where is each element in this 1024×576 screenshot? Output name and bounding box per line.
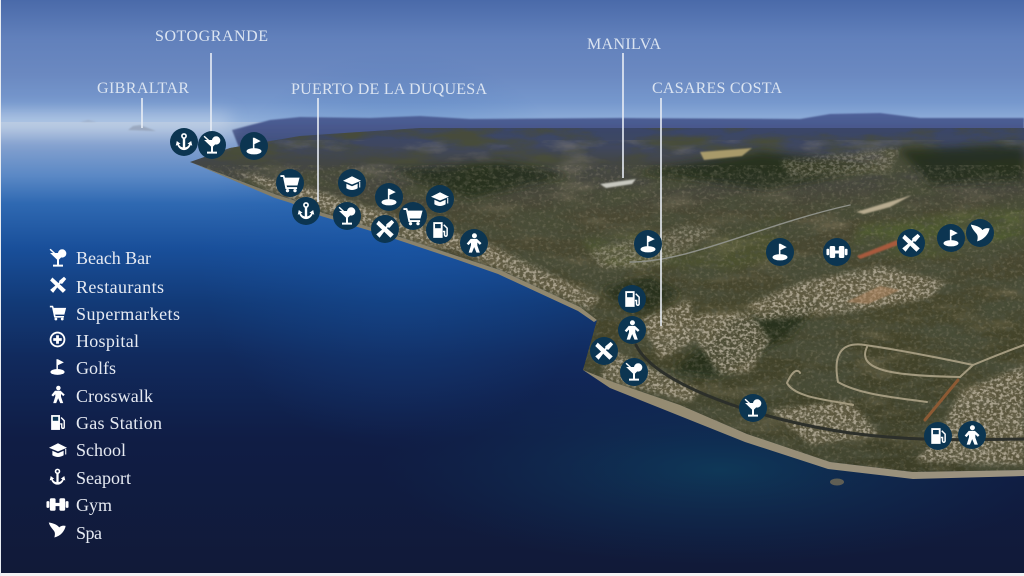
marker: golf (240, 132, 268, 160)
marker: gym (823, 238, 851, 266)
label: Sotogrande (155, 28, 268, 133)
label: Sotogrande: SOTOGRANDE (155, 28, 268, 45)
marker: golf (766, 238, 794, 266)
label: Gibraltar (97, 80, 189, 128)
fine terrain speckle (180, 165, 1024, 478)
marker: seaport (170, 128, 198, 156)
sky (0, 0, 1024, 125)
marker: beach bar (333, 202, 361, 230)
horizon haze (0, 114, 230, 132)
legend: spa: Spa (76, 523, 102, 543)
overall land shade (180, 128, 1024, 478)
label: Gibraltar: GIBRALTAR (97, 80, 189, 97)
label: Manilva: MANILVA (587, 36, 661, 53)
marker: supermarket (276, 169, 304, 197)
map markers (170, 128, 994, 450)
distant Gibraltar rock (80, 120, 156, 131)
marker: golf (937, 224, 965, 252)
legend: restaurants: Restaurants (76, 277, 164, 297)
legend: seaport (50, 468, 131, 488)
legend: hospital: Hospital (76, 331, 139, 351)
golf greens (586, 210, 1024, 267)
legend: spa (49, 522, 102, 543)
marker: beach bar (198, 131, 226, 159)
marker: seaport (292, 197, 320, 225)
beach (190, 162, 1024, 479)
legend: school: School (76, 440, 126, 460)
legend: beach bar: Beach Bar (76, 248, 151, 268)
marker: golf (375, 183, 403, 211)
marker: spa (966, 219, 994, 247)
legend: supermarkets: Supermarkets (76, 304, 180, 324)
roofs and quarry patches (600, 148, 912, 304)
legend: seaport: Seaport (76, 468, 131, 488)
roads (630, 205, 1024, 440)
marker: restaurant (371, 215, 399, 243)
legend: golfs (50, 358, 116, 378)
marker: crosswalk (618, 316, 646, 344)
legend: crosswalk: Crosswalk (76, 386, 153, 406)
marker: beach bar (739, 394, 767, 422)
terrain light patches (253, 140, 1024, 472)
marker: gas station (924, 422, 952, 450)
marker: school (426, 185, 454, 213)
marker: crosswalk (460, 229, 488, 257)
marker: restaurant (897, 229, 925, 257)
rock islet (830, 478, 844, 486)
legend: gas station: Gas Station (76, 413, 162, 433)
marker: supermarket (399, 202, 427, 230)
marker: beach bar (620, 358, 648, 386)
marker: crosswalk (958, 421, 986, 449)
legend: golfs: Golfs (76, 358, 116, 378)
label: Casares Costa: CASARES COSTA (652, 80, 782, 97)
residential development (235, 146, 1024, 468)
terrain dark ridges (180, 128, 1024, 478)
legend: gym (46, 495, 112, 515)
dark vegetation (390, 145, 1024, 378)
legend: gym: Gym (76, 495, 112, 515)
marker: golf (634, 230, 662, 258)
marker: restaurant (590, 337, 618, 365)
legend (46, 248, 180, 543)
marker: gas station (426, 216, 454, 244)
marker: gas station (618, 285, 646, 313)
legend: school (49, 440, 126, 460)
distant mountains (232, 113, 1024, 150)
label: Puerto de la Duquesa: PUERTO DE LA DUQUESA (291, 81, 487, 98)
marker: school (338, 169, 366, 197)
land mass (180, 128, 1024, 480)
